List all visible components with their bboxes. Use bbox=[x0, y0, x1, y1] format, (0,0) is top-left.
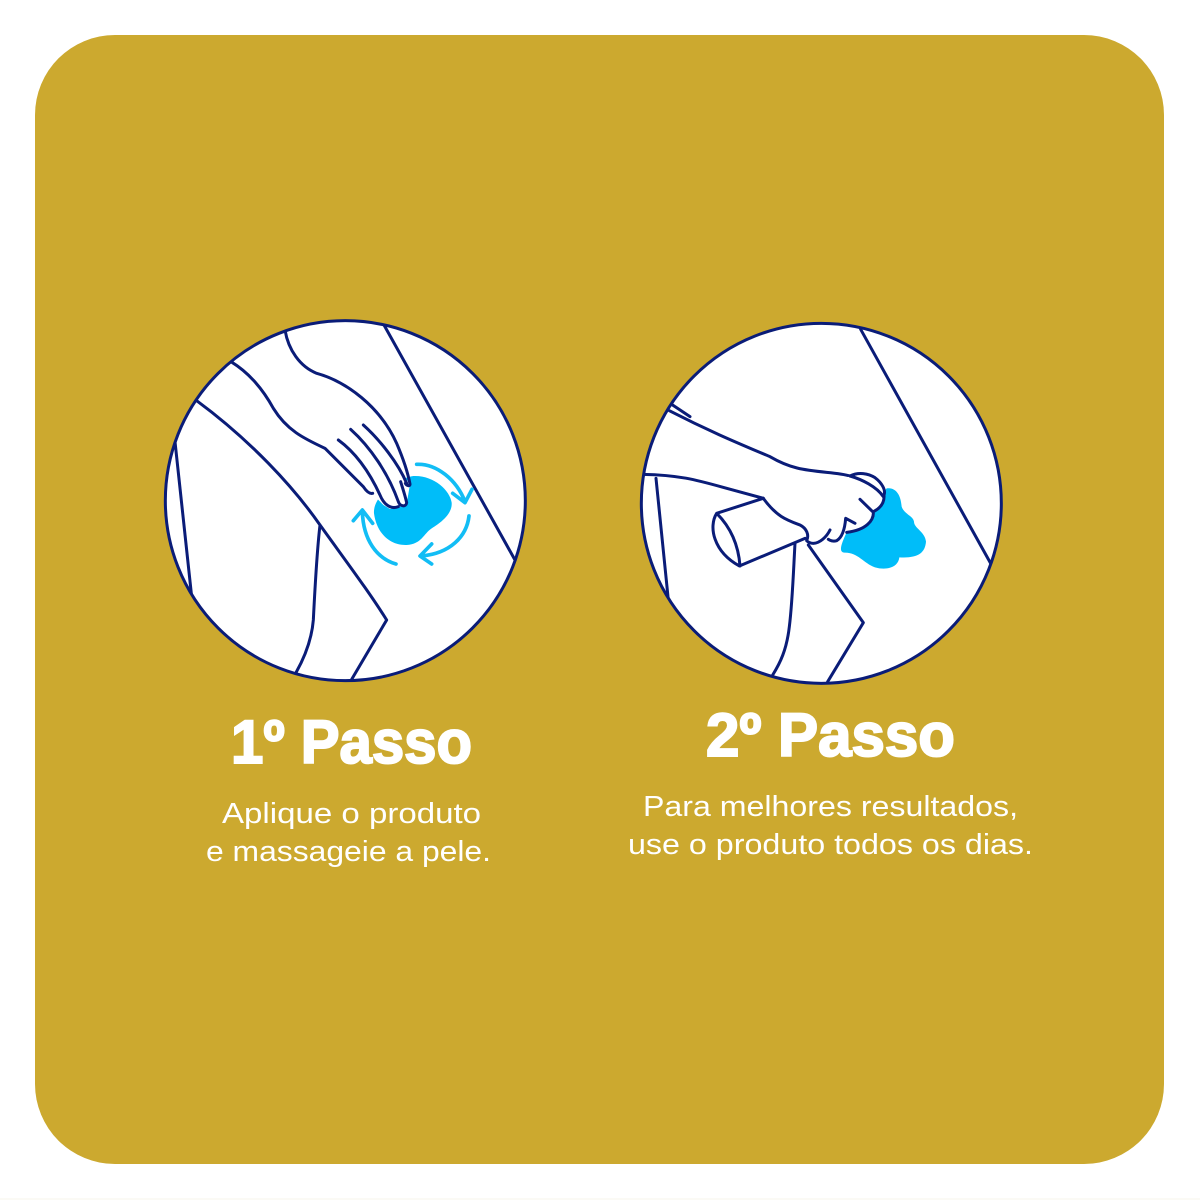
text: step 1 description: Aplique o produto bbox=[222, 798, 481, 830]
arm and leg outlines bbox=[643, 329, 991, 682]
icon: hand mask bbox=[338, 425, 410, 509]
illustration: step 1 hand massaging leg bbox=[165, 321, 525, 681]
icon: circular motion arrows bbox=[353, 464, 472, 564]
text: step 2 description: use o produto todos os dias. bbox=[628, 829, 1033, 861]
icon: hand and fingers bbox=[231, 330, 410, 508]
circle: step 2 background bbox=[641, 323, 1001, 683]
text: step 1 description: e massageie a pele. bbox=[206, 836, 491, 868]
text: step 2 description: Para melhores resultados, bbox=[643, 791, 1018, 823]
circle: step 1 outline bbox=[165, 321, 525, 681]
icon: bottle bbox=[713, 498, 805, 566]
cream blob bbox=[374, 476, 452, 545]
icon: hand mask bbox=[817, 473, 884, 537]
heading: step 2: 2º Passo bbox=[706, 701, 955, 769]
product puddle bbox=[841, 488, 926, 569]
leg outlines bbox=[175, 325, 515, 679]
icon: gripping hand bbox=[763, 473, 884, 543]
text: step 1 description bbox=[206, 798, 491, 868]
text: step 2 description bbox=[628, 791, 1033, 861]
circle: step 1 background bbox=[165, 321, 525, 681]
illustration: step 2 hand dispensing product bbox=[641, 323, 1001, 683]
heading: step 1: 1º Passo bbox=[231, 708, 472, 776]
circle: step 2 outline bbox=[641, 323, 1001, 683]
